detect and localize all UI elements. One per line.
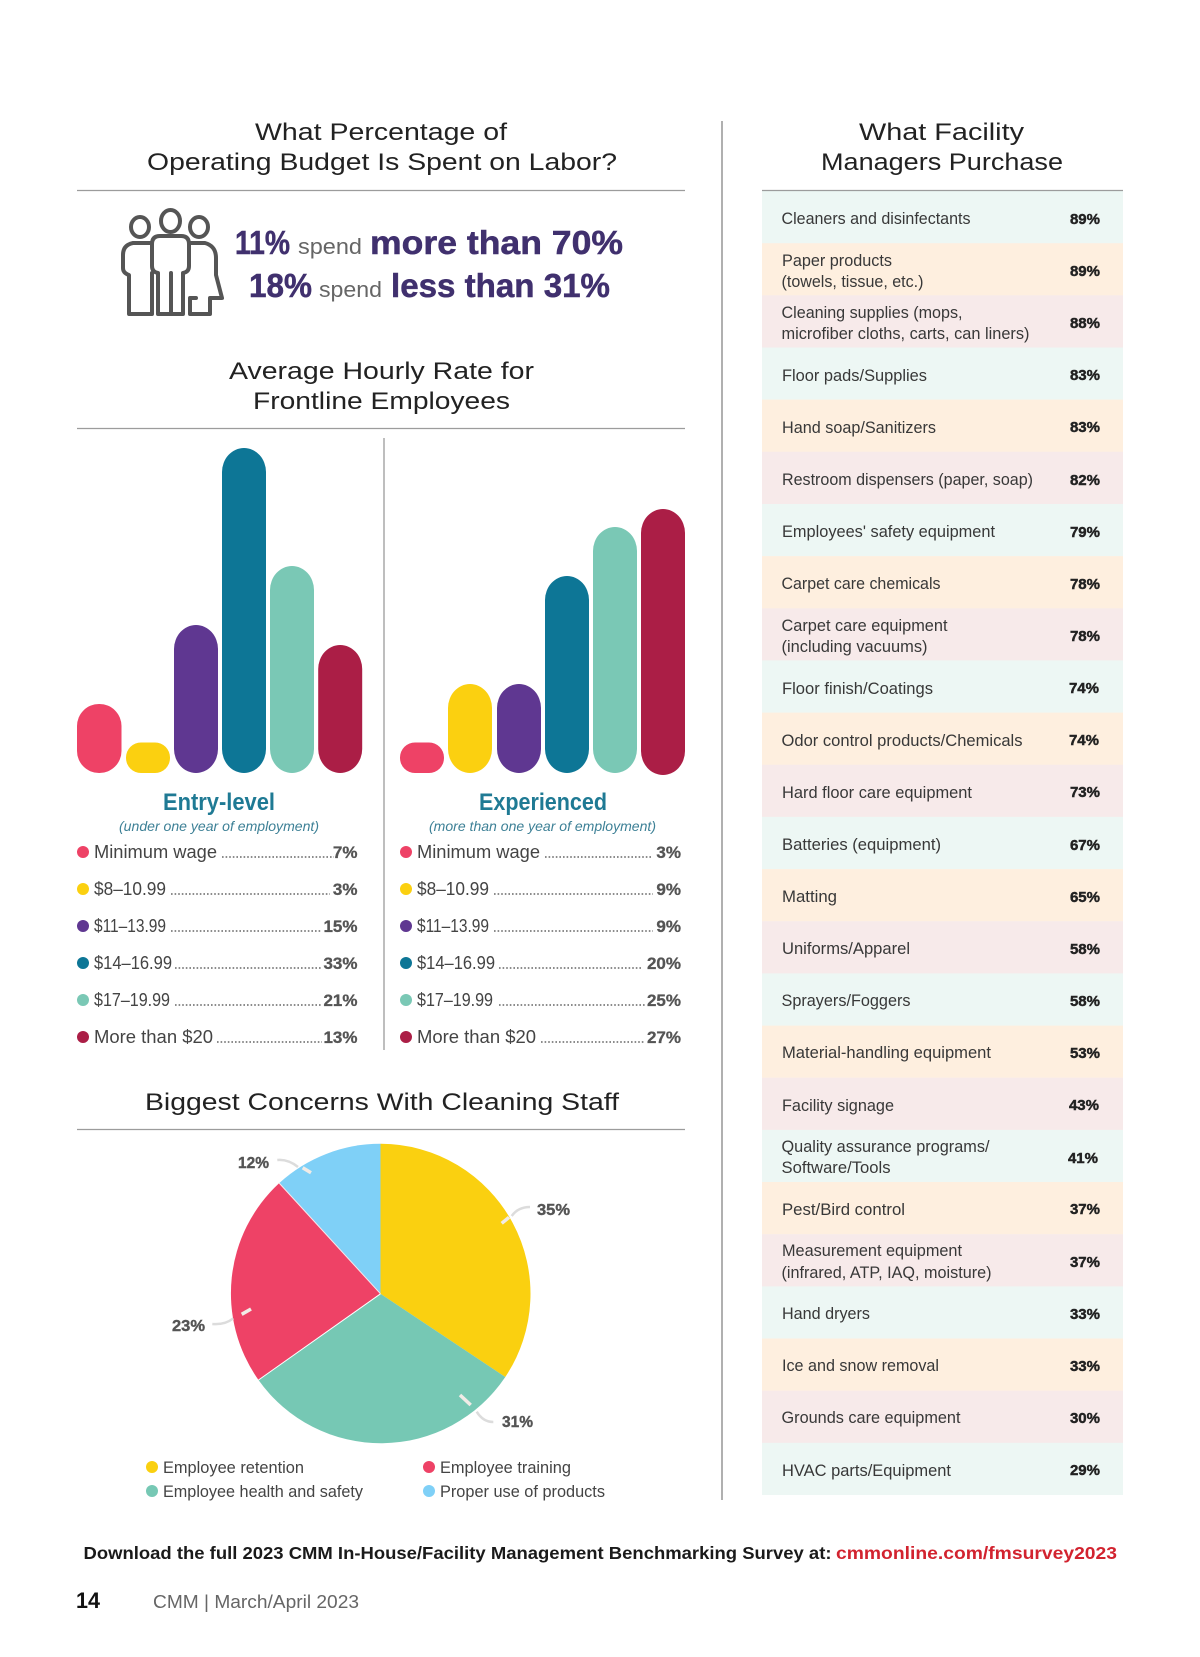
table labels and percentages: Hand dryers [782,1305,870,1323]
heading: purchases: What Facility [859,119,1025,146]
column: experienced legend: $17–19.99 [417,990,493,1010]
column: experienced legend: $11–13.99 [417,916,489,936]
table labels and percentages: 37% [1070,1201,1100,1218]
footer: download line: Download the full 2023 CMM In-House/Facility Management Benchmarking Survey at: [84,1543,832,1563]
bar chart: experienced [400,509,685,775]
table labels and percentages: Carpet care equipment [782,617,948,635]
table labels and percentages: (towels, tissue, etc.) [782,273,924,291]
table labels and percentages: Cleaners and disinfectants [782,210,970,228]
table labels and percentages: 65% [1070,889,1100,906]
column: experienced legend: 20% [647,954,681,973]
table labels and percentages: Batteries (equipment) [782,836,941,854]
note: under one year: (under one year of employment) [119,818,319,834]
table labels and percentages: (infrared, ATP, IAQ, moisture) [782,1264,992,1282]
stat: 18 percent spend less than 31 percent: 18% [249,267,312,304]
heading: average hourly rate: Frontline Employees [253,388,510,415]
panel: what facility managers purchase [762,119,1123,1495]
table labels and percentages: Carpet care chemicals [782,575,940,593]
column: experienced legend: Minimum wage [417,842,540,862]
table labels and percentages: Paper products [782,252,892,270]
column: experienced legend [400,789,681,1047]
column: experienced legend: More than $20 [417,1027,536,1047]
table labels and percentages [782,210,1100,1480]
column: entry-level legend [77,789,358,1047]
pie legend: Employee training [440,1459,571,1477]
table labels and percentages: 89% [1070,211,1100,228]
column: entry-level legend: More than $20 [94,1027,213,1047]
column: experienced legend: 3% [656,843,681,862]
footer: publication: CMM | March/April 2023 [153,1592,359,1612]
table labels and percentages: Facility signage [782,1097,894,1115]
pie label: 12 percent: 12% [238,1155,269,1172]
table labels and percentages: 43% [1069,1097,1099,1114]
table labels and percentages: 53% [1070,1045,1100,1062]
table labels and percentages: 78% [1070,628,1100,645]
footer: page number: 14 [76,1588,101,1613]
footer: download line: cmmonline.com/fmsurvey2023 [836,1543,1117,1563]
table labels and percentages: Uniforms/Apparel [782,940,910,958]
stat: 11 percent spend more than 70 percent: spend [298,234,362,259]
table labels and percentages: Measurement equipment [782,1242,962,1260]
table labels and percentages: Software/Tools [782,1159,890,1177]
table labels and percentages: Hard floor care equipment [782,784,972,802]
pie legend [146,1459,605,1501]
pie label: 31 percent: 31% [502,1414,533,1431]
pie legend: Employee health and safety [163,1483,364,1501]
heading: labor budget [147,119,617,176]
stat: 18 percent spend less than 31 percent [249,267,610,304]
table labels and percentages: 67% [1070,837,1100,854]
column: experienced legend: 9% [656,880,681,899]
table labels and percentages: 89% [1070,263,1100,280]
table labels and percentages: 30% [1070,1410,1100,1427]
heading: biggest concerns: Biggest Concerns With Cleaning Staff [145,1089,619,1116]
table rows backgrounds [762,190,1123,1495]
table labels and percentages: Material-handling equipment [782,1044,991,1062]
column: entry-level legend: $11–13.99 [94,916,166,936]
heading: labor budget: What Percentage of [255,119,507,146]
table labels and percentages: 74% [1069,732,1099,749]
column: experienced legend: 25% [647,991,681,1010]
column: entry-level legend: 33% [323,954,358,973]
table labels and percentages: Odor control products/Chemicals [782,732,1022,750]
heading: labor budget: Operating Budget Is Spent on Labor? [147,149,617,176]
table labels and percentages: Pest/Bird control [782,1201,905,1219]
table labels and percentages: 33% [1070,1306,1100,1323]
subheading: experienced: Experienced [479,789,607,816]
bar chart: entry-level [77,448,362,773]
column: entry-level legend: 15% [323,917,358,936]
footer: download line [84,1543,1117,1563]
subheading: entry-level: Entry-level [163,789,275,816]
column: entry-level legend: 3% [333,880,358,899]
table labels and percentages: 58% [1070,941,1100,958]
heading: average hourly rate: Average Hourly Rate for [229,358,534,385]
table labels and percentages: 78% [1070,576,1100,593]
column: experienced legend: 27% [647,1028,681,1047]
table labels and percentages: Quality assurance programs/ [782,1138,990,1156]
stat: 11 percent spend more than 70 percent [235,224,623,261]
table labels and percentages: Grounds care equipment [782,1409,961,1427]
pie label: 35 percent: 35% [537,1202,570,1219]
table labels and percentages: Matting [782,888,837,906]
column: entry-level legend: 13% [323,1028,358,1047]
pie legend: Employee retention [163,1459,304,1477]
heading: average hourly rate [229,358,534,415]
pie label: 23 percent: 23% [172,1318,205,1335]
stat: 11 percent spend more than 70 percent: more than 70% [370,224,623,261]
column: experienced legend: $8–10.99 [417,879,489,899]
table labels and percentages: Floor pads/Supplies [782,367,927,385]
table labels and percentages: 88% [1070,315,1100,332]
table labels and percentages: Cleaning supplies (mops, [782,304,962,322]
table labels and percentages: 33% [1070,1358,1100,1375]
table labels and percentages: 37% [1070,1254,1100,1271]
stat: 18 percent spend less than 31 percent: spend [319,277,382,302]
table labels and percentages: Employees' safety equipment [782,523,995,541]
heading: purchases: Managers Purchase [821,149,1063,176]
panel: biggest concerns [77,1089,685,1501]
table labels and percentages: 74% [1069,680,1099,697]
table labels and percentages: Hand soap/Sanitizers [782,419,936,437]
stat: 18 percent spend less than 31 percent: less than 31% [391,267,610,304]
table labels and percentages: Restroom dispensers (paper, soap) [782,471,1033,489]
panel: average hourly rate [77,358,685,1050]
table labels and percentages: 58% [1070,993,1100,1010]
column: entry-level legend: 21% [323,991,358,1010]
column: entry-level legend: 7% [333,843,358,862]
note: more than one year: (more than one year of employment) [429,818,656,834]
table labels and percentages: 79% [1070,524,1100,541]
table labels and percentages: 83% [1070,367,1100,384]
table labels and percentages: HVAC parts/Equipment [782,1462,951,1480]
column: experienced legend: 9% [656,917,681,936]
table labels and percentages: 41% [1068,1150,1098,1167]
table labels and percentages: Ice and snow removal [782,1357,939,1375]
panel: labor budget [77,119,685,314]
heading: purchases [821,119,1063,176]
table labels and percentages: Sprayers/Foggers [782,992,910,1010]
table labels and percentages: 82% [1070,472,1100,489]
column: experienced legend: $14–16.99 [417,953,495,973]
column: entry-level legend: $14–16.99 [94,953,172,973]
stat: 11 percent spend more than 70 percent: 11% [235,224,290,261]
table labels and percentages: Floor finish/Coatings [782,680,933,698]
table labels and percentages: 29% [1070,1462,1100,1479]
table labels and percentages: (including vacuums) [782,638,928,656]
icon: three people [123,210,222,314]
pie legend: Proper use of products [440,1483,605,1501]
table labels and percentages: 83% [1070,419,1100,436]
table labels and percentages: microfiber cloths, carts, can liners) [782,325,1030,343]
column: entry-level legend: Minimum wage [94,842,217,862]
column: entry-level legend: $17–19.99 [94,990,170,1010]
pie chart [212,1144,530,1443]
column: entry-level legend: $8–10.99 [94,879,166,899]
table labels and percentages: 73% [1070,784,1100,801]
